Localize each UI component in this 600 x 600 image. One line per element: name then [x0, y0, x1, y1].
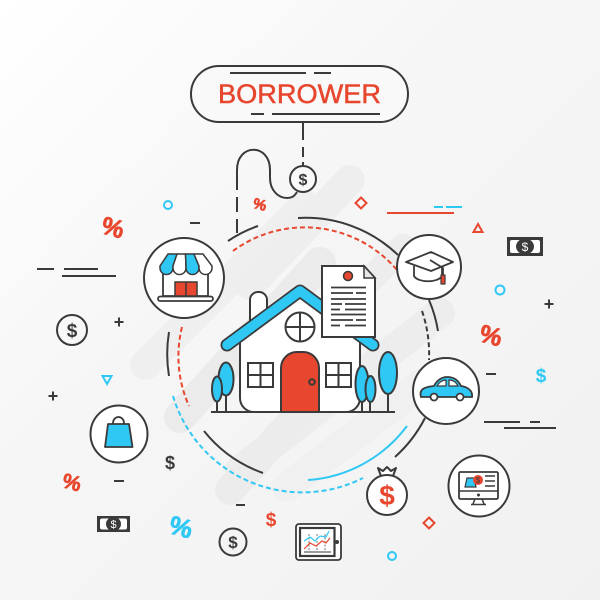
icon: banknote right: $	[522, 240, 529, 254]
decorative small shapes	[102, 198, 504, 560]
icon: banknote right	[507, 237, 543, 256]
icon: money bag: $	[379, 480, 395, 511]
icon: dollar coin on cord	[290, 166, 316, 192]
icon: storefront	[144, 238, 224, 318]
icon: banknote bottom: $	[110, 519, 117, 531]
title text: BORROWER	[218, 79, 381, 109]
percent symbols: %	[166, 510, 196, 544]
icon: dollar coin left	[57, 315, 87, 345]
door	[281, 352, 319, 412]
trees and ground line	[211, 352, 397, 412]
left window	[248, 363, 273, 387]
ring of arcs around the house	[167, 218, 438, 492]
icon: dollar coin left: $	[67, 321, 78, 342]
dollar symbols: $	[165, 453, 175, 473]
icon: monitor with shopping	[448, 456, 510, 516]
icon: dollar coin on cord: $	[299, 172, 308, 189]
icon: dollar coin bottom: $	[228, 533, 238, 552]
title banner	[191, 66, 408, 122]
percent symbols: %	[476, 320, 505, 352]
document	[322, 266, 375, 337]
chimney	[250, 292, 267, 325]
decorative lines, plus and minus signs	[37, 207, 556, 505]
icon: shopping bag	[90, 406, 148, 462]
percent symbols: %	[60, 469, 84, 497]
icon: monitor with shopping: $	[476, 476, 481, 485]
icon: dollar coin bottom	[220, 528, 246, 556]
roof	[227, 291, 373, 345]
percent symbols: %	[251, 195, 268, 215]
right window	[326, 363, 351, 387]
icon: graduation cap	[397, 235, 461, 299]
house illustration	[211, 291, 397, 412]
dollar symbols: $	[266, 510, 277, 531]
dollar symbols	[165, 366, 547, 531]
dollar symbols: $	[536, 366, 547, 387]
round attic window	[286, 312, 314, 342]
percent symbols	[60, 195, 505, 544]
icon: banknote bottom	[97, 516, 130, 532]
house body	[240, 297, 360, 412]
connector: loop cord and dashed line	[237, 123, 303, 233]
icon: car	[413, 358, 479, 424]
icon: tablet with chart	[296, 524, 341, 560]
percent symbols: %	[98, 212, 127, 244]
icon: money bag	[367, 467, 407, 515]
